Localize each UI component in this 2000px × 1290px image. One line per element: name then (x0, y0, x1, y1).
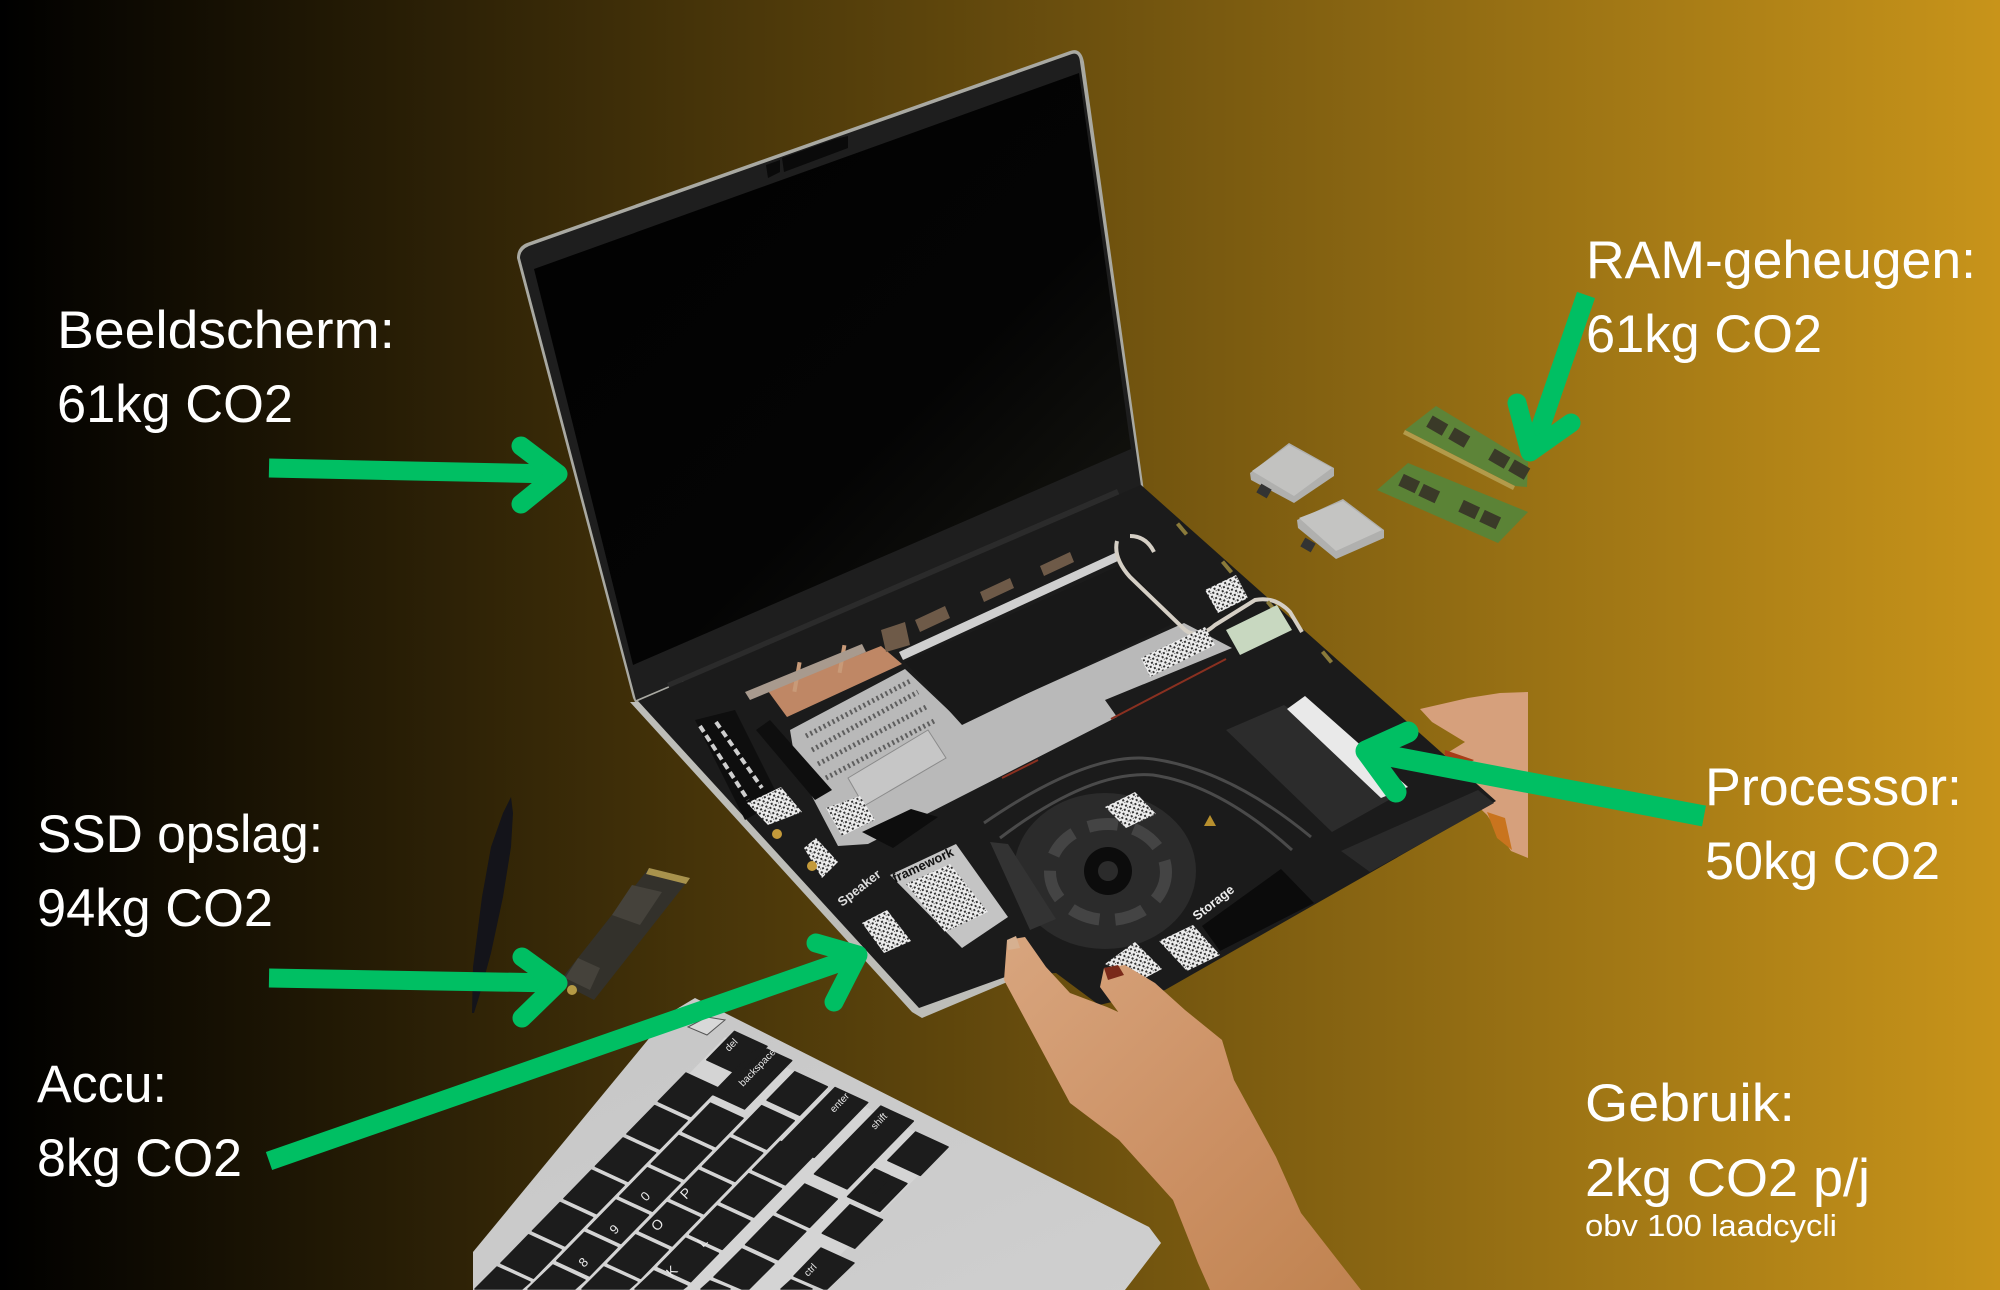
red wires (1002, 659, 1226, 778)
label: RAM-geheugen (1586, 231, 1976, 364)
qr stickers small (826, 796, 875, 836)
label: Beeldscherm (57, 301, 395, 434)
label: Gebruik: obv 100 laadcycli (1585, 1208, 1837, 1243)
label: Accu: 8kg CO2 (37, 1129, 242, 1188)
key labels: shift (869, 1111, 890, 1132)
wifi card (1226, 605, 1292, 655)
dark foam (905, 564, 1178, 725)
hinge bar (667, 489, 1124, 709)
white rail (899, 552, 1120, 660)
photo: laptop base with mainboard (630, 485, 1496, 1018)
label: Accu: Accu: (37, 1055, 167, 1114)
keys (475, 1031, 948, 1289)
photo: spudger tool (472, 797, 513, 1013)
photo: laptop base with mainboard: Speaker (835, 866, 884, 909)
expansion module (990, 842, 1056, 930)
photo: RAM modules (1377, 406, 1530, 543)
key labels: enter (828, 1091, 852, 1115)
key labels: L (694, 1233, 711, 1250)
photo: laptop base with mainboard: framework (890, 844, 957, 886)
screen (534, 73, 1131, 665)
key labels (575, 1037, 890, 1280)
black strip (756, 720, 832, 800)
label: Processor: Processor: (1705, 758, 1962, 817)
hinge clutter (881, 552, 1074, 652)
silver plate (790, 623, 1232, 846)
white cable loops (1116, 536, 1302, 634)
photo: open laptop lid (517, 50, 1145, 712)
storage label (1202, 869, 1314, 951)
label: SSD opslag: SSD opslag: (37, 805, 323, 864)
photo: hand right behind mainboard (1420, 692, 1528, 858)
label: RAM-geheugen: RAM-geheugen: (1586, 231, 1976, 290)
arrow: RAM-geheugen (1517, 295, 1586, 452)
label: SSD opslag: 94kg CO2 (37, 879, 273, 938)
label: Beeldscherm: 61kg CO2 (57, 375, 293, 434)
battery pad right (1226, 705, 1405, 832)
photo: open laptop lid: framework (679, 653, 750, 697)
vents on plate (806, 680, 936, 778)
label: Accu (37, 1055, 242, 1188)
label: Processor (1705, 758, 1962, 891)
key labels: 9 (606, 1221, 622, 1237)
arrow: Processor (1366, 732, 1704, 816)
black connector (862, 809, 938, 848)
heat pipes (984, 758, 1311, 850)
battery silver QR label (890, 844, 1008, 948)
right lower speaker pad (1341, 790, 1494, 872)
arrow: Accu (269, 943, 858, 1161)
fan (1014, 793, 1196, 949)
speaker label (862, 910, 911, 953)
qr top right (1205, 575, 1248, 613)
arrow: SSD (269, 957, 558, 1018)
gold bits along right edge (1176, 522, 1333, 664)
label: Gebruik (1585, 1074, 1870, 1243)
white battery label (1287, 696, 1408, 798)
key labels: O (648, 1215, 667, 1234)
label: Gebruik: 2kg CO2 p/j (1585, 1149, 1870, 1208)
warning triangle (1204, 815, 1216, 826)
white-printed text block left (695, 710, 780, 820)
label: Beeldscherm: Beeldscherm: (57, 301, 395, 360)
arrow: Beeldscherm (269, 446, 558, 504)
photo: SSD (559, 868, 690, 1000)
key labels: 0 (637, 1188, 653, 1204)
photo: expansion cards (1250, 443, 1384, 559)
label: Processor: 50kg CO2 (1705, 832, 1940, 891)
photo: second laptop with keyboard (473, 990, 1173, 1290)
key labels: ctrl (802, 1262, 819, 1279)
key labels: del (723, 1037, 740, 1054)
key labels: P (677, 1184, 695, 1202)
label: SSD opslag (37, 805, 323, 938)
key labels: 8 (575, 1254, 591, 1270)
qr on fan (1105, 792, 1156, 828)
qr left (747, 787, 802, 825)
orange/yellow small details (772, 829, 782, 839)
photo: laptop base with mainboard: Storage (1190, 882, 1237, 923)
photo: hand lower (1004, 936, 1361, 1290)
copper (768, 646, 902, 717)
label on plate (1141, 627, 1215, 677)
label: Gebruik: Gebruik: (1585, 1074, 1795, 1133)
key labels: K (663, 1262, 681, 1280)
webcam (766, 136, 848, 178)
key labels: backspace (737, 1047, 779, 1089)
label: RAM-geheugen: 61kg CO2 (1586, 305, 1822, 364)
